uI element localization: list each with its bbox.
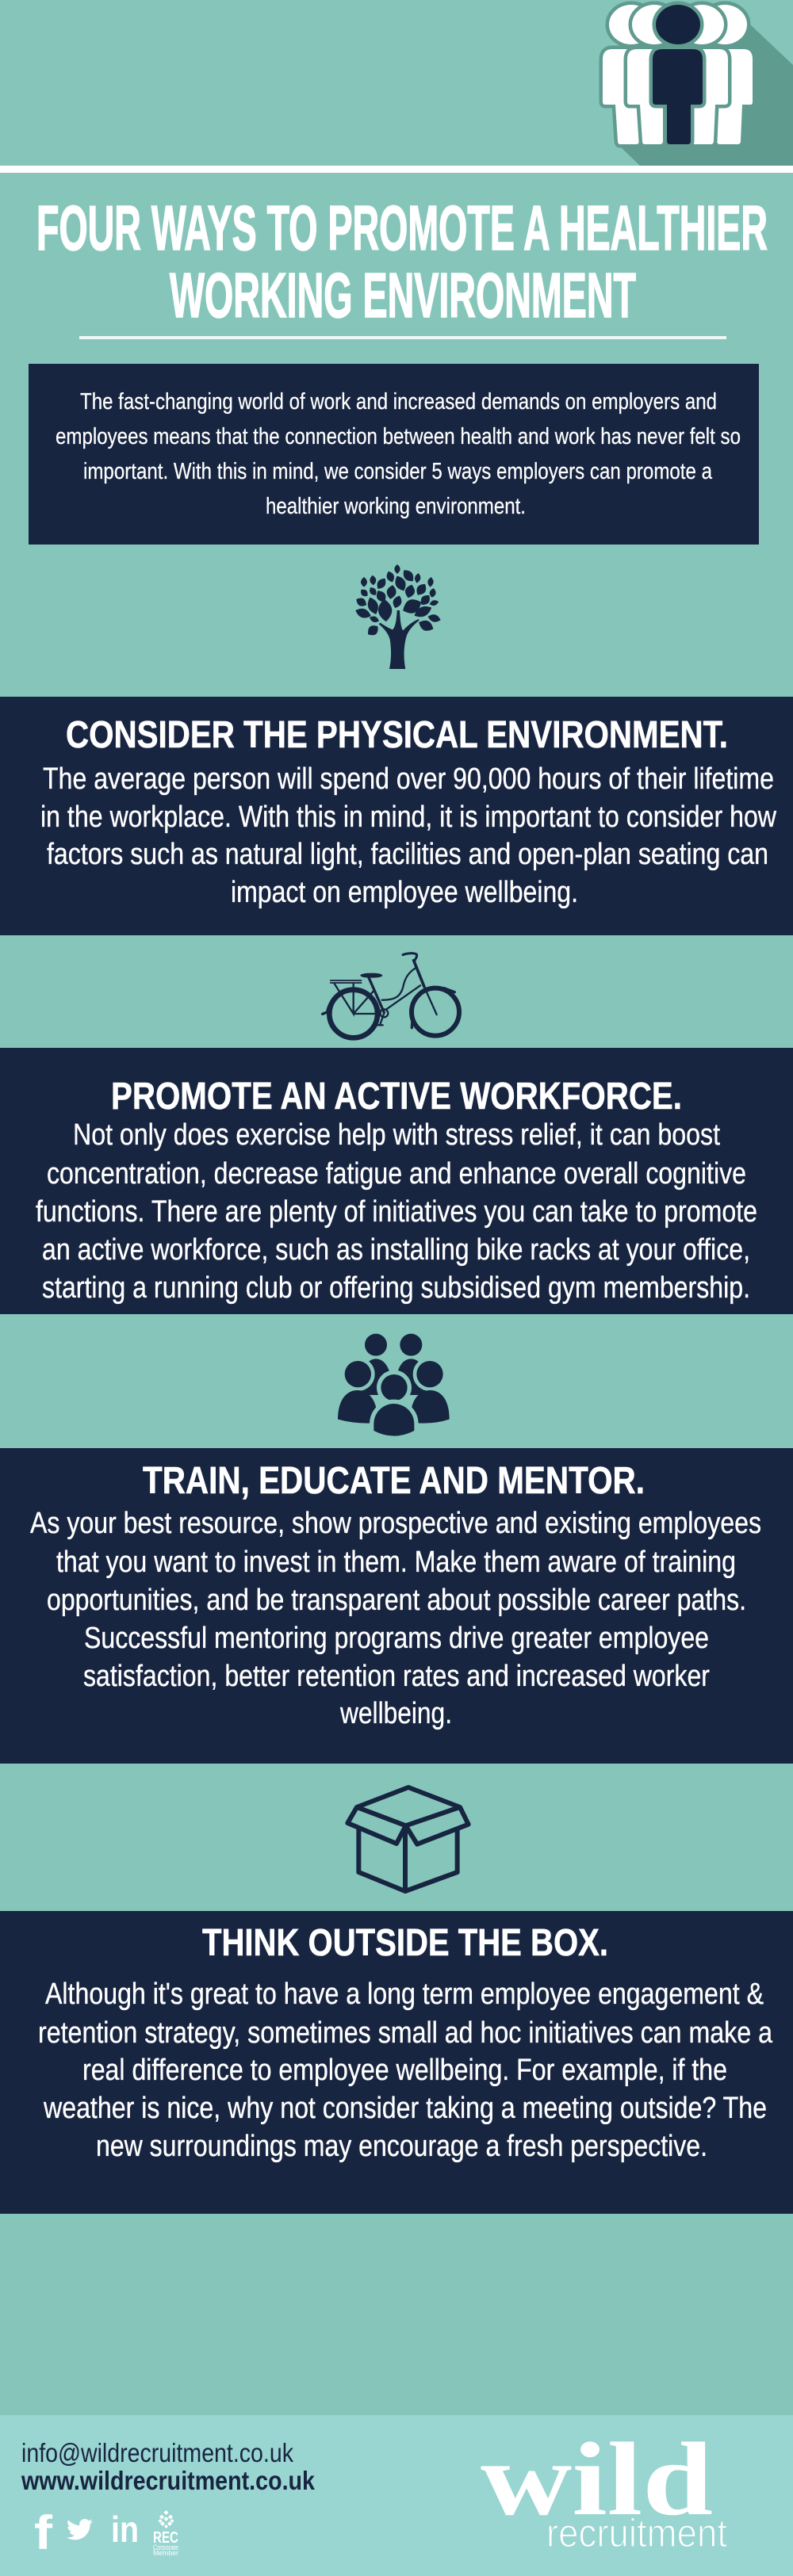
heading: TRAIN, EDUCATE AND MENTOR. <box>143 1460 645 1502</box>
icon: twitter <box>67 2519 93 2540</box>
logo: REC corporate member: Corporate <box>153 2544 178 2551</box>
panel: consider the physical environment <box>0 697 793 935</box>
logo: wild recruitment: recruitment <box>546 2511 727 2555</box>
body text <box>36 1118 757 1305</box>
icon: group of people with long shadow <box>603 5 793 166</box>
panel: think outside the box <box>0 1911 793 2214</box>
icon: tree <box>354 564 442 669</box>
icon: open box <box>347 1787 469 1891</box>
icon: linkedin: in <box>111 2509 139 2550</box>
logo: REC corporate member: Member <box>153 2549 178 2557</box>
panel: promote an active workforce <box>0 1048 793 1314</box>
intro text <box>56 389 741 519</box>
icon: bicycle <box>323 954 459 1038</box>
title underline <box>79 336 726 339</box>
contact email: info@wildrecruitment.co.uk <box>21 2438 293 2467</box>
top white divider <box>0 166 793 173</box>
icon: team of people <box>338 1334 450 1436</box>
icon: facebook: f <box>34 2506 53 2559</box>
panel: introduction <box>29 364 759 545</box>
logo: REC corporate member: REC <box>153 2529 178 2547</box>
body text <box>30 1507 761 1730</box>
logo: wild recruitment <box>481 2421 727 2555</box>
body text <box>40 762 776 909</box>
intro text: healthier working environment. <box>266 494 526 519</box>
heading: PROMOTE AN ACTIVE WORKFORCE. <box>111 1076 682 1118</box>
logo: REC corporate member <box>153 2510 178 2557</box>
title <box>36 193 768 331</box>
panel: footer <box>0 2415 793 2576</box>
contact website: www.wildrecruitment.co.uk <box>21 2466 316 2495</box>
body text: wellbeing. <box>339 1697 452 1730</box>
panel: train, educate and mentor <box>0 1448 793 1764</box>
body text: impact on employee wellbeing. <box>231 876 578 909</box>
heading: THINK OUTSIDE THE BOX. <box>202 1922 608 1964</box>
body text <box>38 1978 773 2163</box>
logo: wild recruitment: wild <box>481 2421 713 2537</box>
